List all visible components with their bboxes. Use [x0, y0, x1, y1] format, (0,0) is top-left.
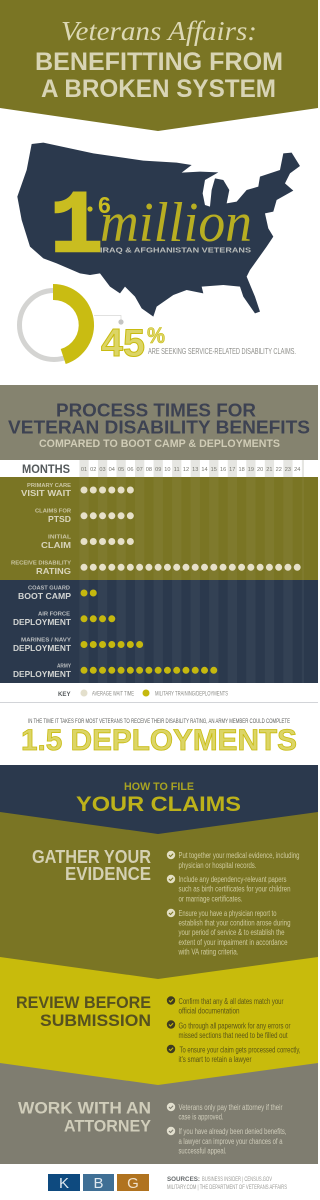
title script line: Veterans Affairs: — [61, 16, 257, 46]
months header: 05 — [118, 467, 124, 473]
logo: KBG: B — [93, 1175, 104, 1192]
months header: 22 — [276, 467, 282, 473]
panel: work with an attorney — [0, 1060, 318, 1164]
logo: KBG — [48, 1174, 149, 1192]
logo: KBG: G — [127, 1175, 139, 1192]
panel: footer — [48, 1174, 287, 1192]
row labels: wait times: CLAIMS FOR — [35, 508, 71, 514]
months header: MONTHS — [22, 462, 70, 476]
months header: 23 — [285, 467, 291, 473]
row labels: deployments: ARMY — [57, 664, 71, 670]
checklist — [167, 1103, 286, 1156]
checklist: Ensure you have a physician report to — [178, 909, 277, 918]
panel: process times heading — [0, 385, 318, 460]
months header: 15 — [211, 467, 217, 473]
sources — [167, 1176, 287, 1191]
panel: how to file heading: HOW TO FILE — [124, 781, 194, 793]
panel: gather your evidence: GATHER YOUR — [32, 847, 151, 867]
row labels: deployments — [13, 586, 72, 679]
months header: 12 — [183, 467, 189, 473]
number six: 6 — [98, 192, 111, 218]
months header: 17 — [229, 467, 235, 473]
months header: 10 — [164, 467, 171, 473]
big number one: 1 — [50, 179, 103, 278]
row labels: wait times: CLAIM — [41, 540, 71, 550]
chart key: AVERAGE WAIT TIME — [92, 690, 134, 698]
wait time band — [0, 477, 318, 580]
months header: 02 — [90, 467, 96, 473]
row labels: deployments: DEPLOYMENT — [13, 669, 72, 679]
panel: review before submission: REVIEW BEFORE — [16, 993, 151, 1012]
checklist: missed sections that need to be filled out — [178, 1031, 288, 1040]
months header: 04 — [109, 467, 115, 473]
panel: header banner — [0, 0, 318, 131]
panel: work with an attorney: WORK WITH AN — [18, 1098, 151, 1118]
panel: how to file heading: YOUR CLAIMS — [76, 793, 241, 816]
months header: 03 — [99, 467, 106, 473]
row labels: wait times: RATING — [36, 566, 71, 576]
checklist: Confirm that any & all dates match your — [178, 997, 284, 1006]
panel: gather your evidence — [0, 811, 318, 979]
months header: 19 — [248, 467, 254, 473]
panel: review before submission: SUBMISSION — [40, 1011, 151, 1030]
months header: 20 — [257, 467, 263, 473]
panel: timeline chart — [0, 460, 318, 683]
panel: process times heading: COMPARED TO BOOT CAMP & DEPLOYMENTS — [39, 438, 280, 450]
checklist: physician or hospital records. — [178, 861, 256, 870]
decimal point — [87, 206, 93, 212]
map caption: IRAQ & AFGHANISTAN VETERANS — [100, 248, 251, 254]
months header: 13 — [192, 467, 198, 473]
checklist: or marriage certificates. — [178, 894, 242, 904]
chart key: MILITARY TRAINING/DEPLOYMENTS — [155, 690, 228, 698]
months header: 21 — [266, 467, 273, 473]
checklist: official documentation — [178, 1006, 240, 1016]
row labels: deployments: COAST GUARD — [28, 586, 70, 592]
statistic 45 percent — [101, 322, 296, 365]
dots: average wait time — [84, 490, 297, 567]
statistic 45 percent: % — [147, 323, 165, 348]
row labels: wait times: PTSD — [48, 514, 71, 524]
sources: BUSINESS INSIDER | CENSUS.GOV — [202, 1176, 272, 1183]
row labels: deployments: BOOT CAMP — [18, 591, 71, 601]
checklist: case is approved. — [178, 1112, 224, 1122]
checklist: establish that your condition arose during — [178, 918, 290, 928]
row labels: deployments: DEPLOYMENT — [13, 617, 72, 627]
months header: 16 — [220, 467, 226, 473]
row labels: wait times: VISIT WAIT — [21, 488, 72, 498]
checklist: Include any dependency-relevant papers — [178, 875, 287, 884]
dots: military deployments — [84, 593, 214, 670]
panel: process times heading: PROCESS TIMES FOR — [56, 400, 256, 420]
panel: process times heading: VETERAN DISABILITY BENEFITS — [8, 418, 310, 438]
million word: million — [100, 192, 252, 254]
logo: KBG: K — [59, 1175, 69, 1192]
panel: gather your evidence: EVIDENCE — [65, 864, 151, 884]
checklist: your period of service & to establish the — [178, 928, 284, 937]
row labels: wait times — [11, 483, 72, 576]
checklist: Veterans only pay their attorney if their — [178, 1103, 283, 1112]
chart key: KEY — [58, 691, 71, 698]
deployment band — [0, 580, 318, 683]
chart key — [0, 690, 318, 703]
row labels: wait times: PRIMARY CARE — [27, 483, 71, 489]
sources: SOURCES: — [167, 1176, 200, 1183]
row labels: wait times: RECEIVE DISABILITY — [11, 560, 71, 566]
checklist: such as birth certificates for your children — [178, 884, 290, 894]
checklist: If you have already been denied benefits, — [178, 1127, 286, 1136]
months header: 06 — [127, 467, 134, 473]
checklist — [167, 996, 300, 1064]
checklist: a lawyer can improve your chances of a — [178, 1137, 283, 1146]
map of the United States — [17, 143, 300, 317]
panel: review before submission — [0, 955, 318, 1085]
callout: deployments comparison: 1.5 DEPLOYMENTS — [21, 724, 297, 757]
months header: 07 — [136, 467, 143, 473]
months header: 18 — [238, 467, 245, 473]
statistic 45 percent: 45 — [101, 322, 145, 365]
title main line one: BENEFITTING FROM — [35, 48, 283, 76]
checklist: with VA rating criteria. — [178, 948, 238, 956]
title main line two: A BROKEN SYSTEM — [41, 75, 276, 103]
checklist: it's smart to retain a lawyer — [178, 1055, 252, 1064]
panel: work with an attorney: ATTORNEY — [64, 1116, 152, 1136]
months header — [0, 460, 318, 477]
months header: 11 — [174, 467, 180, 473]
panel: how to file heading — [0, 765, 318, 834]
checklist: successful appeal. — [178, 1146, 226, 1156]
checklist: extent of your impairment in accordance — [178, 938, 288, 947]
donut chart 45 percent — [20, 284, 124, 364]
months header: 09 — [155, 467, 161, 473]
months header: 24 — [294, 467, 300, 473]
row labels: deployments: MARINES / NAVY — [21, 638, 71, 644]
months header: 14 — [201, 467, 208, 473]
checklist — [167, 851, 300, 956]
row labels: deployments: AIR FORCE — [38, 612, 70, 618]
months header: 08 — [146, 467, 152, 473]
months header: 01 — [81, 467, 87, 473]
row labels: deployments: DEPLOYMENT — [13, 643, 72, 653]
column stripes — [79, 477, 304, 683]
row labels: wait times: INITIAL — [48, 534, 72, 540]
